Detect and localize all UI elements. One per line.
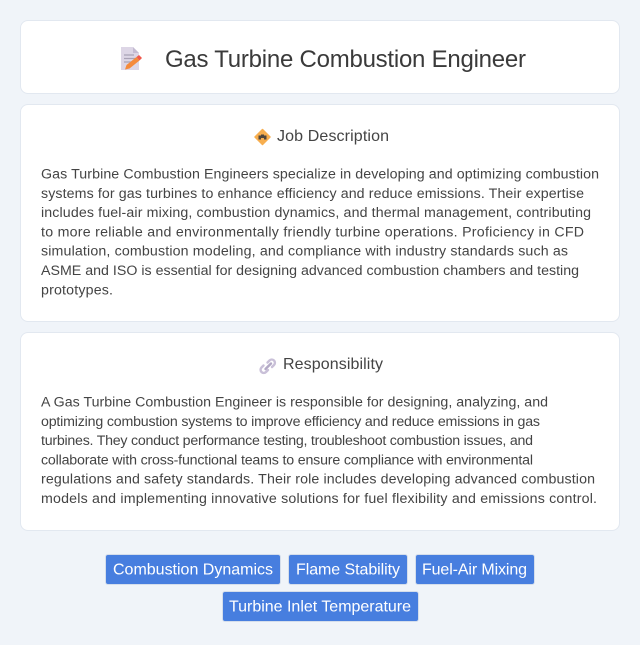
- icon: document with pencil: [121, 47, 142, 70]
- job description text: prototypes.: [41, 282, 113, 298]
- job description text: simulation, combustion modeling, and compliance with industry standards such as: [41, 244, 568, 260]
- tag: combustion dynamics: [105, 554, 281, 585]
- panel: responsibility: [20, 332, 620, 531]
- tag: flame stability: [288, 554, 408, 585]
- heading: job description: Job Description: [277, 128, 389, 145]
- panel: title card: [20, 20, 620, 94]
- tag: turbine inlet temperature: Turbine Inlet Temperature: [229, 598, 411, 616]
- responsibility text: regulations and safety standards. Their role includes developing advanced combustion: [41, 472, 595, 488]
- tag: fuel-air mixing: Fuel-Air Mixing: [422, 562, 527, 578]
- tag: turbine inlet temperature: [222, 591, 419, 622]
- icon: chain link: [259, 358, 276, 374]
- responsibility text: turbines. They conduct performance testing, troubleshoot combustion issues, and: [41, 433, 533, 449]
- icon: orange diamond: [254, 128, 271, 146]
- heading: responsibility: Responsibility: [283, 356, 383, 373]
- responsibility text: [41, 394, 597, 507]
- job description text: Gas Turbine Combustion Engineers specialize in developing and optimizing combustion: [41, 166, 599, 182]
- panel: job description: [20, 104, 620, 322]
- job description text: to more reliable and environmentally friendly turbine operations. Proficiency in CFD: [41, 224, 584, 240]
- responsibility text: collaborate with cross-functional teams to ensure compliance with environmental: [41, 452, 533, 468]
- job description text: [41, 166, 599, 298]
- tag: flame stability: Flame Stability: [296, 562, 400, 578]
- responsibility text: optimizing combustion systems to improve efficiency and reduce emissions in gas: [41, 414, 540, 430]
- tag: fuel-air mixing: [415, 554, 535, 585]
- job description text: includes fuel-air mixing, combustion dynamics, and thermal management, contributing: [41, 205, 591, 221]
- job description text: ASME and ISO is essential for designing advanced combustion chambers and testing: [41, 263, 579, 279]
- tag: combustion dynamics: Combustion Dynamics: [113, 562, 273, 578]
- responsibility text: models and implementing innovative solutions for fuel flexibility and emissions control.: [41, 491, 597, 507]
- job description text: systems for gas turbines to enhance efficiency and reduce emissions. Their expertise: [41, 186, 584, 202]
- responsibility text: A Gas Turbine Combustion Engineer is responsible for designing, analyzing, and: [41, 394, 548, 410]
- title: Gas Turbine Combustion Engineer: [165, 46, 526, 73]
